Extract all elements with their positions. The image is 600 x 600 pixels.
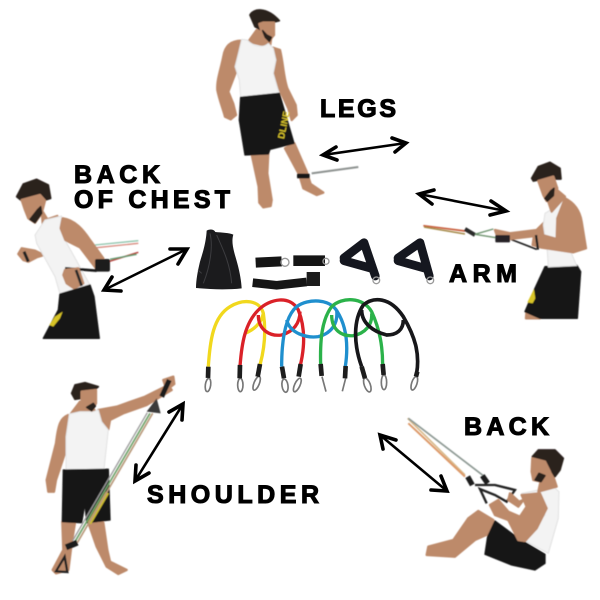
heading: back of chest: BACK xyxy=(74,161,160,189)
heading: back: BACK xyxy=(464,413,549,441)
green band xyxy=(321,300,383,365)
figure: back of chest exercise xyxy=(17,179,138,338)
figure: shoulder exercise xyxy=(47,377,174,574)
heading: arm: ARM xyxy=(449,260,517,288)
icon: handle two xyxy=(398,243,434,284)
figure: arm exercise xyxy=(423,162,586,318)
heading: legs: LEGS xyxy=(320,95,396,123)
arrow: arm xyxy=(419,190,506,215)
figure: legs exercise: DLINE xyxy=(276,110,292,140)
carabiners xyxy=(204,375,419,393)
heading: back of chest xyxy=(74,161,230,214)
equipment: accessories and bands xyxy=(196,230,434,393)
yellow band xyxy=(208,302,265,367)
arrow: back xyxy=(380,435,447,491)
figure: back exercise xyxy=(408,418,563,570)
arrow: shoulder xyxy=(135,404,183,481)
figure: legs exercise xyxy=(217,10,358,207)
blue band xyxy=(282,301,347,367)
arrow: legs xyxy=(323,138,406,160)
heading: shoulder: SHOULDER xyxy=(147,481,319,509)
arrow: back of chest xyxy=(104,249,187,291)
band end cuffs xyxy=(208,364,417,378)
red band xyxy=(240,300,304,367)
icon: handle one xyxy=(344,243,380,284)
heading: back of chest: OF CHEST xyxy=(74,186,230,214)
icon: door anchor and ankle straps xyxy=(253,258,329,286)
icon: drawstring bag xyxy=(196,230,242,289)
black band xyxy=(356,300,418,373)
